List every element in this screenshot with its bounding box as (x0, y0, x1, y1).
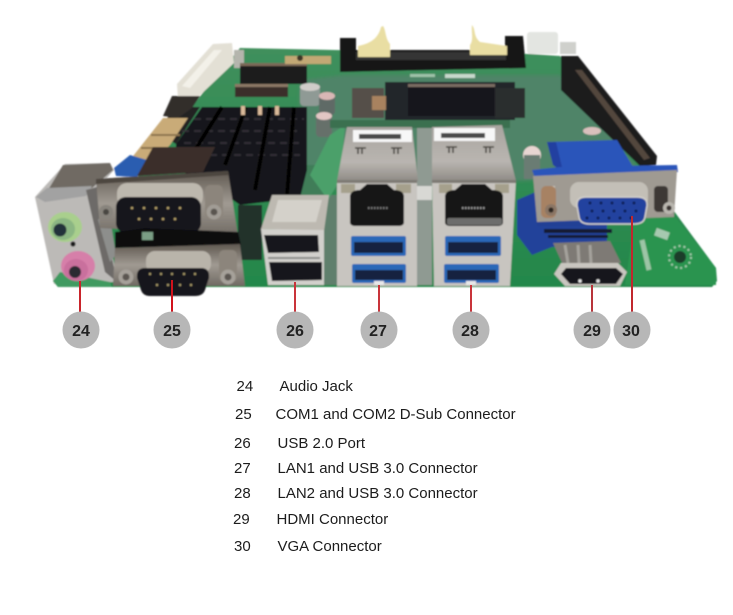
legend row 26: 26 (234, 435, 251, 452)
memory slot (340, 25, 526, 78)
badge 28 (452, 312, 490, 348)
legend row 27: LAN1 and USB 3.0 Connector (278, 460, 478, 477)
yellow headers (130, 118, 188, 165)
USB 2.0 port (261, 195, 329, 285)
legend row 29: HDMI Connector (276, 511, 388, 528)
LAN2 and USB 3.0 connector (432, 125, 516, 286)
callout line 30 (631, 216, 633, 313)
badge 30: 30 (622, 323, 640, 340)
callout line 25 (171, 280, 173, 313)
audio jack bracket (35, 163, 118, 287)
white power connector (177, 43, 234, 100)
legend row 28: 28 (234, 485, 251, 502)
badge 24: 24 (72, 323, 90, 340)
badge 29 (574, 312, 610, 348)
badge 27 (360, 312, 398, 348)
legend row 28: LAN2 and USB 3.0 Connector (278, 485, 478, 502)
HDMI connector (553, 241, 627, 286)
badge 29: 29 (583, 323, 601, 340)
badge 26 (276, 312, 314, 348)
small white connector (527, 32, 576, 54)
callout line 29 (591, 285, 593, 313)
blue connector rear (114, 155, 147, 177)
badge 27: 27 (369, 323, 387, 340)
board detail right (642, 228, 691, 270)
COM1 D-sub connector (96, 147, 238, 236)
legend row 30: 30 (234, 538, 251, 555)
LAN1 and USB 3.0 connector (337, 127, 418, 286)
badge 25: 25 (163, 323, 181, 340)
black gap between COM ports (115, 228, 241, 248)
legend row 24: 24 (236, 378, 253, 395)
callout line 27 (378, 285, 380, 313)
COM2 D-sub connector (113, 244, 245, 296)
legend row 25: COM1 and COM2 D-Sub Connector (276, 406, 516, 423)
legend row 30: VGA Connector (278, 538, 382, 555)
badge 28: 28 (461, 323, 479, 340)
badge 25 (154, 312, 190, 348)
callout line 28 (470, 285, 472, 313)
legend row 25: 25 (235, 406, 252, 423)
pink audio jack (61, 251, 95, 281)
legend row 29: 29 (233, 511, 250, 528)
circuit board (53, 48, 717, 287)
dark chips beside USB (238, 128, 432, 285)
legend list (233, 378, 516, 555)
board traces middle (310, 125, 345, 200)
black expansion slot (561, 56, 657, 166)
callout line 24 (79, 281, 81, 313)
badge 30 (614, 312, 650, 348)
badge 26: 26 (286, 323, 304, 340)
green audio jack (48, 212, 82, 242)
legend row 24: Audio Jack (280, 378, 353, 395)
CPU area (330, 82, 601, 179)
legend row 27: 27 (234, 460, 251, 477)
motherboard photo (35, 25, 717, 296)
capacitors (300, 83, 335, 137)
legend row 26: USB 2.0 Port (278, 435, 366, 452)
VGA connector (532, 140, 678, 238)
badge 24 (62, 312, 100, 348)
blue VGA body lower (517, 190, 607, 255)
callout line 26 (294, 282, 296, 313)
legend row 26 (234, 435, 366, 452)
heatsink (165, 106, 307, 205)
legend row 24 (236, 378, 353, 395)
M.2 slots (235, 55, 331, 97)
